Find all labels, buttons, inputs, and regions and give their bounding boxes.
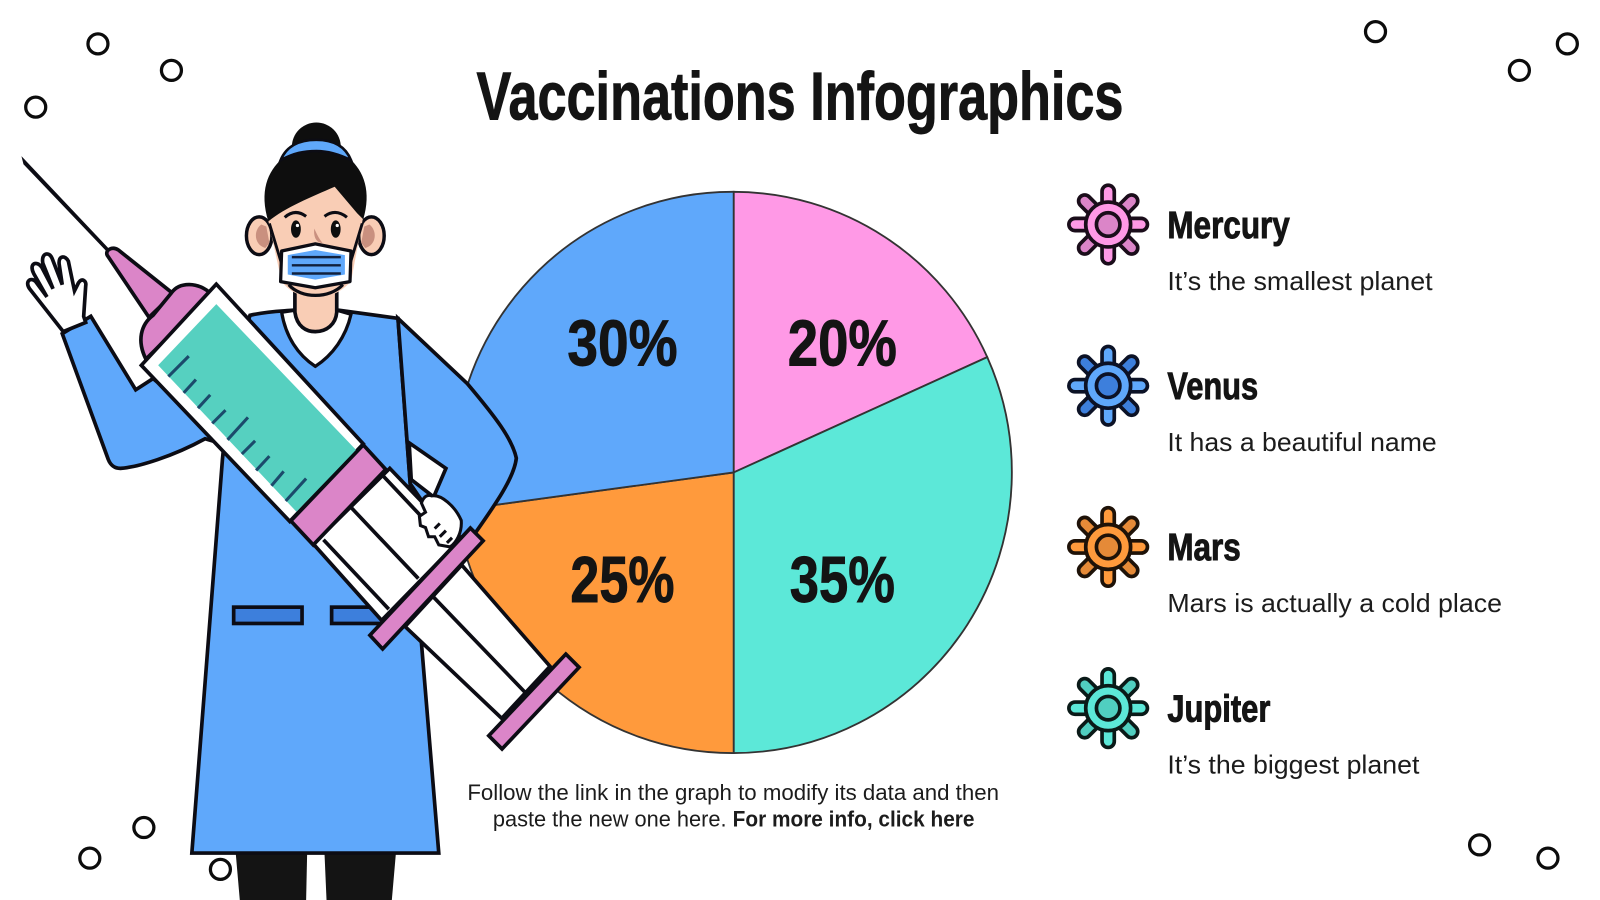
neck bbox=[295, 281, 337, 332]
nurse illustration bbox=[21, 122, 579, 900]
plunger tube lower bbox=[405, 565, 550, 718]
description: It’s the smallest planet bbox=[1167, 268, 1433, 296]
face bbox=[267, 182, 363, 297]
syringe bbox=[21, 156, 579, 749]
right arm bbox=[398, 318, 516, 541]
legs bbox=[236, 853, 396, 900]
pink band bbox=[291, 445, 386, 545]
bun bbox=[292, 122, 341, 171]
heading: Jupiter: Jupiter bbox=[1167, 687, 1271, 729]
pie slice: orange 25% bbox=[456, 472, 734, 753]
note text: Follow the link in the graph to modify its data and then bbox=[467, 780, 999, 805]
white gap at the waist bbox=[409, 443, 446, 497]
needle bbox=[21, 156, 109, 252]
legend item: Jupiter bbox=[1069, 669, 1419, 779]
heading: Venus: Venus bbox=[1167, 365, 1258, 407]
pie slice: pink 20% bbox=[734, 192, 987, 472]
description: Mars is actually a cold place bbox=[1167, 590, 1502, 618]
collar bbox=[282, 310, 351, 366]
hub bbox=[141, 285, 211, 359]
icon: pink virus bbox=[1069, 185, 1147, 264]
legend item: Mars bbox=[1069, 508, 1502, 618]
note text bbox=[467, 780, 999, 832]
pie label 25%: 25% bbox=[570, 543, 674, 616]
note text: For more info, click here bbox=[733, 807, 974, 832]
hair band bbox=[281, 140, 351, 160]
coat pocket left bbox=[234, 607, 302, 623]
legend item: Venus bbox=[1069, 346, 1437, 457]
barrel bbox=[141, 284, 363, 521]
pie label 30%: 30% bbox=[567, 306, 678, 379]
flange middle bbox=[370, 528, 483, 649]
pie label 35%: 35% bbox=[790, 543, 895, 616]
coat body bbox=[192, 310, 439, 853]
description: It’s the biggest planet bbox=[1167, 751, 1419, 779]
coat pocket right bbox=[332, 607, 385, 623]
description: It has a beautiful name bbox=[1167, 429, 1437, 457]
legend item: Mercury bbox=[1069, 185, 1433, 296]
icon: blue virus bbox=[1069, 346, 1147, 425]
face mask bbox=[281, 244, 351, 288]
title: Vaccinations Infographics bbox=[477, 59, 1123, 134]
ears bbox=[246, 217, 384, 255]
pie slice: teal 35% bbox=[734, 357, 1012, 753]
pie label 20%: 20% bbox=[788, 306, 897, 379]
chin line bbox=[289, 285, 343, 295]
nozzle bbox=[107, 248, 173, 317]
plunger tube upper bbox=[313, 468, 459, 620]
graduation ticks bbox=[168, 356, 306, 501]
flange end bbox=[489, 654, 579, 749]
left arm bbox=[62, 316, 240, 468]
eyes and brows bbox=[285, 212, 347, 243]
heading: Mars: Mars bbox=[1167, 526, 1241, 568]
pie slice: blue 30% bbox=[454, 192, 734, 510]
liquid bbox=[158, 304, 356, 512]
icon: orange virus bbox=[1069, 508, 1147, 586]
icon: teal virus bbox=[1069, 669, 1147, 747]
mask straps bbox=[269, 223, 362, 267]
glove: raised hand bbox=[28, 254, 86, 332]
heading: Mercury: Mercury bbox=[1167, 204, 1290, 246]
note text: paste the new one here. bbox=[493, 807, 727, 832]
gripping hand bbox=[419, 495, 461, 547]
pie chart bbox=[454, 192, 1012, 753]
hair bbox=[265, 151, 367, 221]
